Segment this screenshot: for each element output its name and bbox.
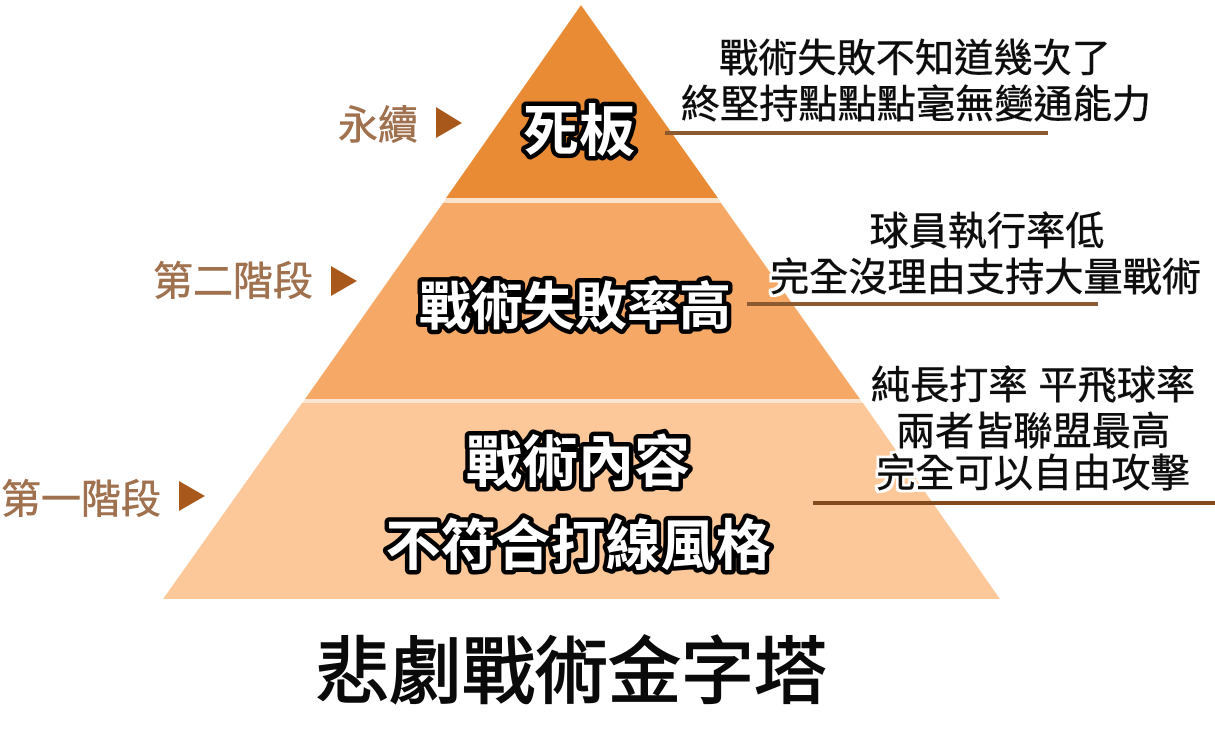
pyramid (163, 5, 1000, 599)
tier text: bottom: 不符合打線風格 (385, 515, 771, 577)
leader line: bottom tier (813, 501, 1215, 505)
note: bottom tier (871, 365, 1195, 496)
note: top tier: 戰術失敗不知道幾次了 (719, 38, 1111, 81)
note: bottom tier: 完全可以自由攻擊 (876, 453, 1190, 496)
stage label: sustained: 永續 (338, 104, 418, 148)
pyramid tier: top (446, 5, 718, 198)
note: middle tier (770, 211, 1201, 300)
note: middle tier: 球員執行率低 (869, 211, 1105, 254)
stage label: sustained (338, 104, 462, 148)
pyramid tier: middle (305, 203, 860, 399)
tier text: top: 死板 (523, 100, 635, 163)
tier text: middle: 戰術失敗率高 (419, 279, 731, 337)
note: middle tier: 完全沒理由支持大量戰術 (770, 257, 1201, 300)
note: bottom tier: 兩者皆聯盟最高 (896, 411, 1170, 454)
arrow: stage one (179, 481, 205, 511)
tier text: bottom (385, 431, 771, 577)
pyramid tier: bottom (163, 403, 1000, 599)
note: bottom tier: 純長打率 平飛球率 (871, 365, 1195, 408)
title: 悲劇戰術金字塔 (316, 632, 827, 713)
note: top tier (681, 38, 1151, 127)
arrow: sustained (436, 107, 462, 138)
tier text: bottom: 戰術內容 (466, 431, 690, 494)
stage label: stage one: 第一階段 (1, 478, 161, 522)
stage label: stage two: 第二階段 (153, 260, 313, 304)
leader line: middle tier (747, 302, 1098, 306)
leader line: top tier (665, 131, 1048, 135)
note: top tier: 終堅持點點點毫無變通能力 (681, 84, 1151, 127)
arrow: stage two (331, 266, 357, 296)
